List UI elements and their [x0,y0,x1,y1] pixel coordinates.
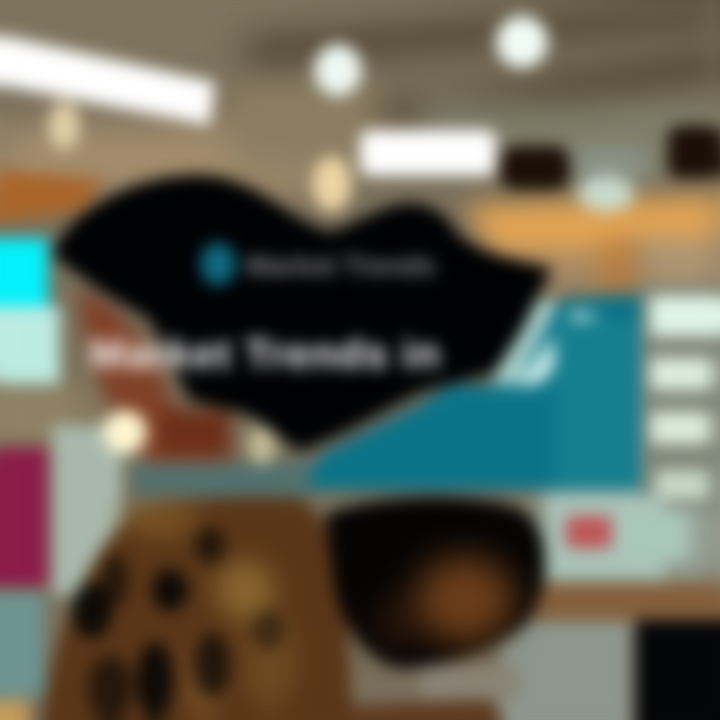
teal logo dot [200,242,236,286]
wooden shelf band [0,126,720,290]
left pink display [0,425,122,720]
bottom right [420,620,720,720]
left teal panel [0,238,72,438]
main title: Market Trends in [90,330,440,377]
person hair with dark shape [52,175,552,452]
leopard print coat [42,497,352,720]
face [78,290,235,462]
second person shoulder [350,700,505,720]
right shelves [640,285,720,510]
blurred headline [90,242,440,377]
grey-teal caption band [130,462,310,496]
teal banner chart [300,295,640,490]
light patch right of banner [535,495,720,619]
second person dark hair [325,497,545,668]
top label: Market Trends [246,250,436,281]
ceiling lights [0,16,548,212]
coat spots [72,527,284,720]
